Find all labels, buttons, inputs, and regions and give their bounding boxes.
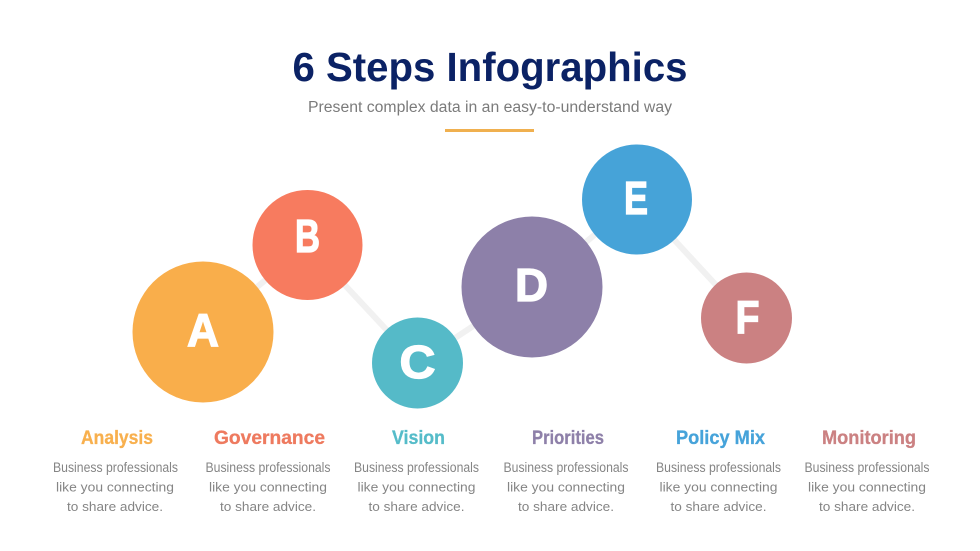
step D circle: D: [515, 259, 548, 311]
column: Monitoring: Business professionals: [804, 460, 930, 475]
column: Governance: [206, 428, 331, 514]
column: Policy Mix: Business professionals: [656, 460, 781, 475]
column: Priorities: Business professionals: [504, 460, 629, 475]
column: Analysis: like you connecting: [56, 480, 174, 494]
step D circle: [462, 216, 602, 358]
column: Monitoring: Monitoring: [822, 428, 916, 449]
column: Priorities: like you connecting: [507, 480, 625, 494]
column: Vision: [354, 428, 479, 514]
column: Monitoring: like you connecting: [808, 480, 926, 494]
column: Vision: like you connecting: [358, 480, 476, 494]
column: Analysis: [53, 428, 178, 514]
column: Analysis: to share advice.: [67, 499, 163, 514]
step B circle: B: [295, 210, 320, 262]
column: Vision: Business professionals: [354, 460, 479, 475]
column: Monitoring: [804, 428, 930, 514]
column: Governance: Governance: [214, 428, 325, 449]
subtitle: Present complex data in an easy-to-understand way: [308, 99, 672, 116]
column: Priorities: to share advice.: [518, 499, 614, 514]
step E circle: E: [624, 172, 648, 224]
step C circle: C: [400, 336, 436, 388]
column: Policy Mix: to share advice.: [670, 499, 766, 514]
step A circle: [132, 262, 274, 402]
step F circle: [701, 272, 792, 364]
step F circle: F: [736, 291, 760, 343]
column: Vision: Vision: [392, 428, 445, 449]
column: Priorities: [504, 428, 629, 514]
column: Vision: to share advice.: [368, 499, 464, 514]
step E circle: [582, 144, 692, 254]
column: Analysis: Business professionals: [53, 460, 178, 475]
connector path: [203, 200, 746, 363]
title: 6 Steps Infographics: [292, 44, 688, 90]
column: Governance: Business professionals: [206, 460, 331, 475]
column: Governance: to share advice.: [220, 499, 316, 514]
column: Policy Mix: like you connecting: [660, 480, 778, 494]
column: Governance: like you connecting: [209, 480, 327, 494]
column: Priorities: Priorities: [532, 428, 604, 449]
column: Policy Mix: Policy Mix: [676, 428, 765, 449]
step A circle: A: [187, 304, 219, 356]
column: Analysis: Analysis: [81, 428, 153, 449]
step B circle: [252, 190, 362, 300]
column: Monitoring: to share advice.: [819, 499, 915, 514]
step C circle: [372, 318, 463, 408]
accent bar: [445, 129, 534, 132]
column: Policy Mix: [656, 428, 781, 514]
